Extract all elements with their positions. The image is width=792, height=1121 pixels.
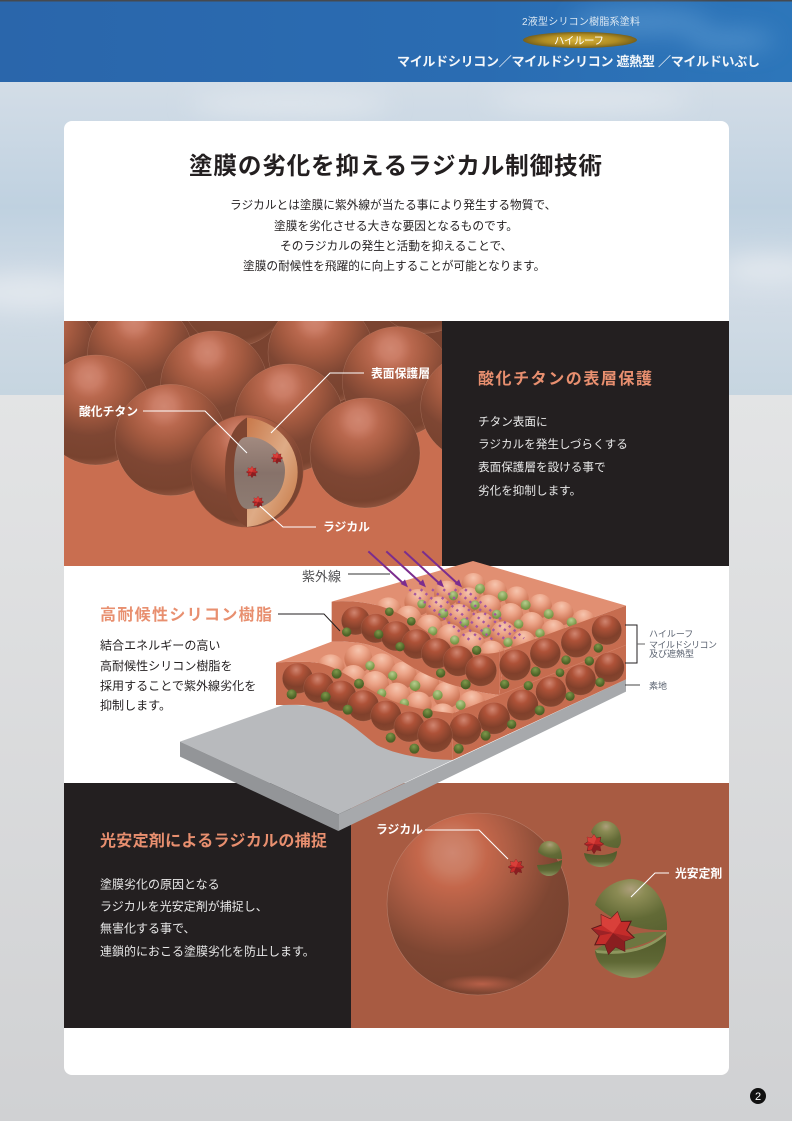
stabilizer particles — [287, 607, 605, 754]
body text: チタン表面に — [478, 416, 548, 428]
callout: light stabilizer — [631, 866, 722, 897]
lower layer — [276, 642, 499, 760]
body text: 劣化を抑制します。 — [478, 484, 581, 498]
heading: 酸化チタンの表層保護 — [478, 370, 652, 388]
silicone resin body text: 抑制します。 — [100, 698, 171, 712]
intro text — [230, 198, 556, 273]
page number — [750, 1088, 766, 1104]
substrate label: 素地 — [649, 680, 667, 691]
large resin sphere — [387, 813, 569, 995]
label: ultraviolet — [302, 569, 390, 584]
upper layer — [332, 561, 626, 760]
substrate plate — [180, 679, 626, 831]
product badge: ハイルーフ — [554, 35, 604, 47]
main white card — [64, 121, 729, 1075]
large stabilizer — [587, 879, 667, 978]
panel: light stabilizer text — [64, 783, 351, 1028]
intro text: そのラジカルの発生と活動を抑えることで、 — [280, 239, 512, 253]
label: ultraviolet: 紫外線 — [302, 569, 341, 584]
panel: light stabilizer illustration — [351, 783, 729, 1028]
heading: 光安定剤によるラジカルの捕捉 — [100, 831, 327, 850]
body text: ラジカルを発生しづらくする — [478, 437, 628, 451]
product badge — [523, 32, 637, 48]
callout: radical — [260, 506, 370, 534]
body text — [478, 416, 628, 498]
cut-away particle — [191, 415, 303, 527]
layer legend: ハイルーフ — [649, 629, 693, 639]
callout: radical — [376, 822, 508, 859]
heading: silicone resin — [100, 605, 340, 631]
silicone resin body text — [100, 638, 256, 712]
callout: titanium oxide — [79, 404, 247, 453]
page background — [0, 82, 792, 508]
body text — [100, 876, 315, 958]
panel: surface protection text — [442, 321, 729, 566]
silicone resin body text: 採用することで紫外線劣化を — [100, 678, 256, 693]
intro text: 塗膜の耐候性を飛躍的に向上することが可能となります。 — [243, 259, 545, 273]
UV arrows — [368, 551, 462, 587]
body text: ラジカルを光安定剤が捕捉し、 — [100, 898, 268, 914]
resin particles — [282, 606, 624, 752]
callout: titanium oxide: 酸化チタン — [79, 404, 138, 418]
silicone resin body text: 結合エネルギーの高い — [100, 638, 220, 652]
callout: surface protection layer: 表面保護層 — [371, 366, 430, 380]
UV dots — [409, 589, 524, 642]
panel: titanium oxide illustration — [64, 321, 442, 566]
product names: マイルドシリコン／マイルドシリコン 遮熱型 ／マイルドいぶし — [397, 54, 760, 69]
heading: silicone resin: 高耐候性シリコン樹脂 — [100, 605, 272, 624]
callout: radical: ラジカル — [323, 520, 370, 534]
layer legend: 及び遮熱型 — [649, 648, 694, 659]
body text: 表面保護層を設ける事で — [478, 460, 606, 474]
layer legend: マイルドシリコン — [649, 640, 717, 650]
page number: 2 — [755, 1091, 761, 1103]
callout: surface protection layer — [271, 366, 430, 433]
body text: 連鎖的におこる塗膜劣化を防止します。 — [100, 944, 315, 958]
header subtitle: 2液型シリコン樹脂系塗料 — [522, 15, 640, 28]
title: 塗膜の劣化を抑えるラジカル制御技術 — [189, 153, 602, 180]
header band — [0, 0, 792, 82]
callout: radical: ラジカル — [376, 822, 423, 836]
layered coating diagram — [180, 551, 626, 831]
substrate label — [625, 680, 667, 691]
body text: 無害化する事で、 — [100, 920, 196, 936]
intro text: 塗膜を劣化させる大きな要因となるものです。 — [274, 219, 518, 233]
body text: 塗膜劣化の原因となる — [100, 876, 220, 892]
callout: light stabilizer: 光安定剤 — [675, 866, 722, 880]
silicone resin body text: 高耐候性シリコン樹脂を — [100, 658, 233, 673]
layer legend — [625, 625, 717, 663]
intro text: ラジカルとは塗膜に紫外線が当たる事により発生する物質で、 — [230, 198, 556, 212]
medium stabilizer — [584, 821, 621, 867]
small stabilizer — [537, 841, 562, 876]
small radical — [508, 859, 524, 875]
